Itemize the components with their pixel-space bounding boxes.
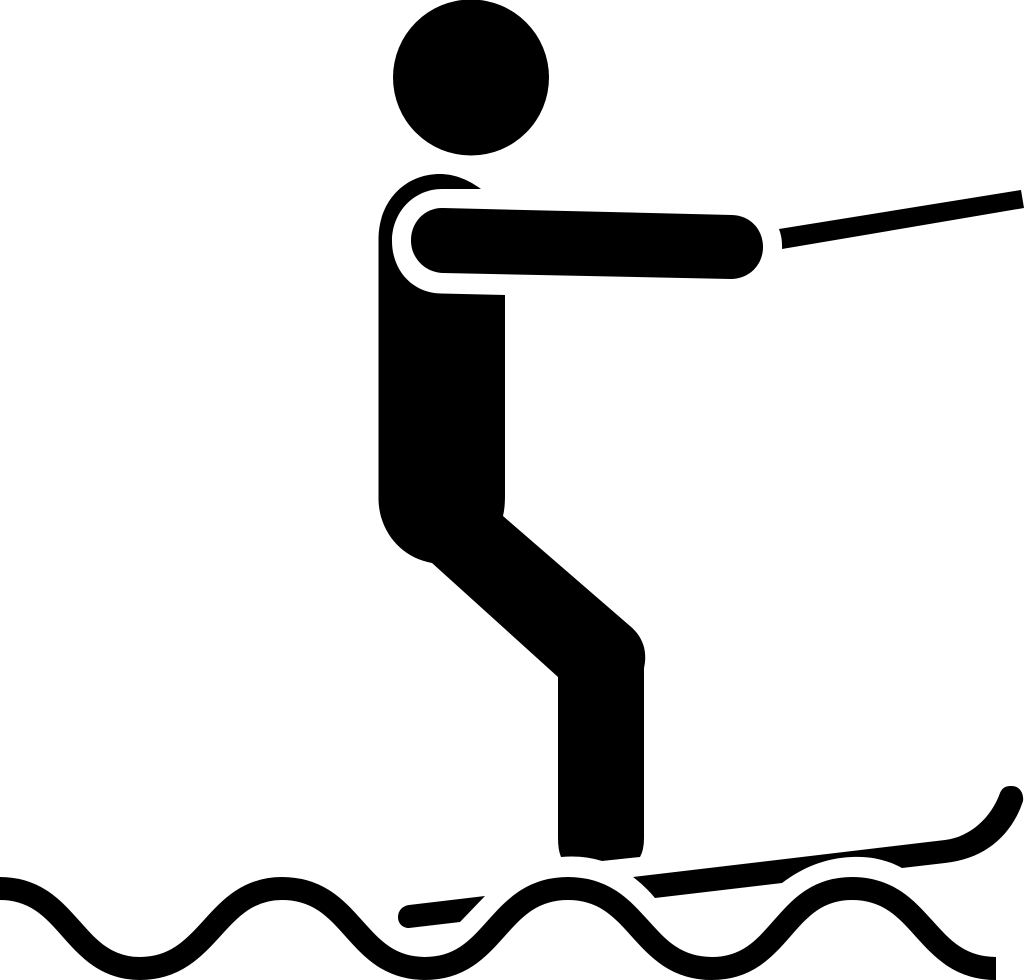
- icon: arm: [411, 208, 763, 279]
- icon: ski rear section: [398, 896, 485, 928]
- icon: water wave: [0, 888, 996, 968]
- icon: tow rope: [779, 190, 1024, 249]
- icon: torso and leg: [378, 174, 645, 861]
- icon: ski front section: [633, 786, 1023, 898]
- icon: head: [393, 0, 549, 156]
